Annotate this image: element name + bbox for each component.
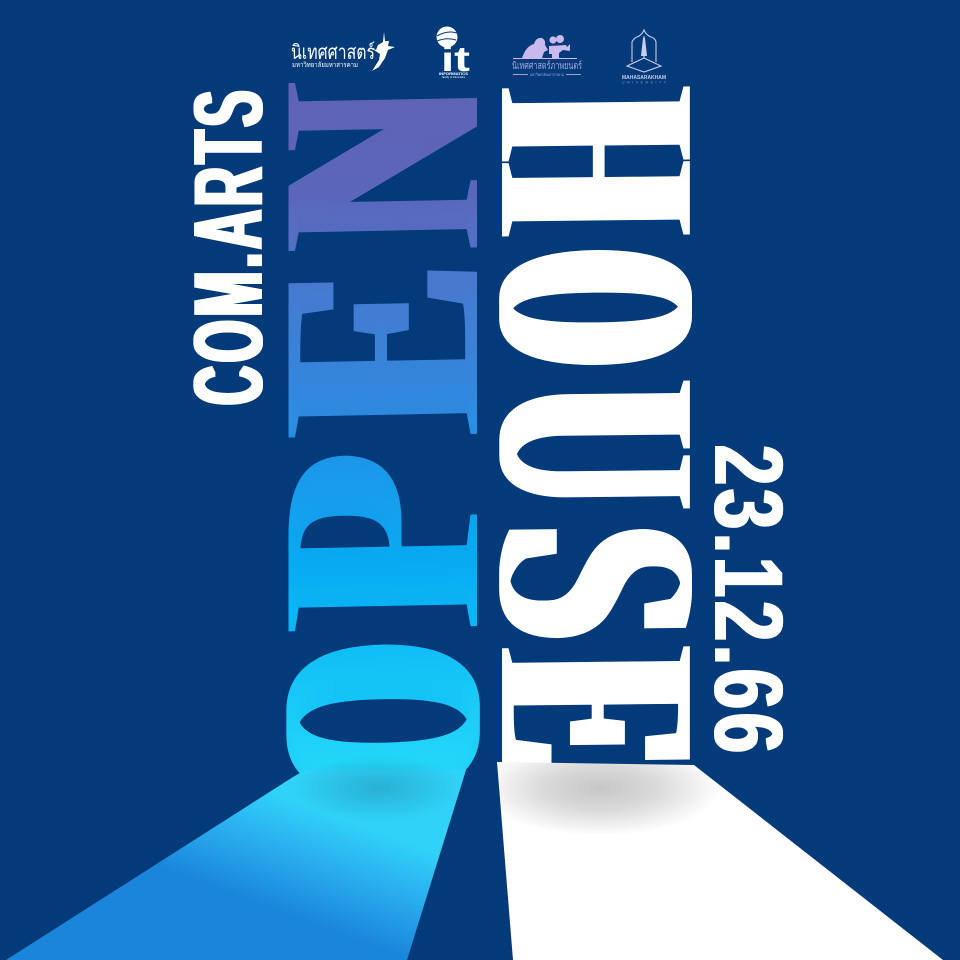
heading: HOUSE: E [436, 651, 760, 770]
heading: OPEN: N [218, 83, 543, 249]
side text: date: 23.12.66 [693, 445, 801, 757]
logo: mahasarakham university: MAHASARAKHAM [622, 75, 666, 81]
icon: jumping figure [371, 32, 395, 71]
blue light beam [6, 770, 466, 960]
icon: university tower [627, 30, 661, 72]
logo: communication arts faculty [291, 32, 395, 71]
icon: globe [436, 26, 458, 48]
white light beam [497, 762, 943, 960]
heading: OPEN [217, 83, 543, 798]
logo: informatics: faculty of Informatics [442, 75, 465, 79]
heading: OPEN: P [218, 452, 543, 630]
icon: cameraman [522, 38, 570, 58]
logo: informatics [436, 26, 470, 79]
shadow on blue beam [293, 754, 463, 822]
heading: HOUSE: S [436, 524, 760, 640]
heading: HOUSE: O [436, 251, 762, 364]
logo: communication arts faculty: มหาวิทยาลัยมหาสารคาม [292, 61, 358, 69]
heading: HOUSE [436, 91, 762, 770]
shadow on white beam [498, 762, 707, 830]
logo: informatics: it [441, 40, 470, 79]
heading: HOUSE: H [436, 91, 760, 232]
heading: OPEN: O [219, 644, 543, 798]
logo: film faculty: มหาวิทยาลัยมหาสารคาม [530, 72, 564, 77]
logo: mahasarakham university [622, 30, 667, 84]
logo: communication arts faculty: นิเทศศาสตร์ [291, 41, 375, 64]
logo: film faculty [512, 35, 582, 77]
heading: HOUSE: U [436, 384, 761, 507]
logo: informatics: INFORMATICS [439, 71, 468, 76]
heading: OPEN: E [217, 263, 543, 435]
logo: mahasarakham university: UNIVERSITY [622, 80, 667, 84]
side text: COM.ARTS: COM.ARTS [173, 87, 283, 405]
logo: film faculty: นิเทศศาสตร์ภาพยนตร์ [512, 60, 582, 72]
